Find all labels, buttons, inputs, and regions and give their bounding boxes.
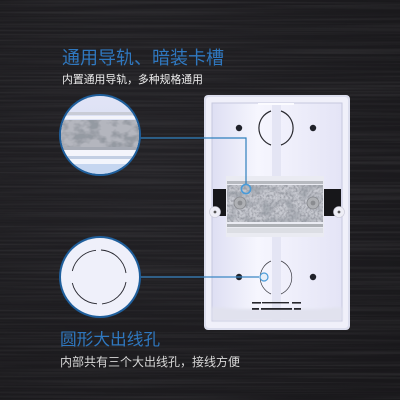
DIN rail xyxy=(226,176,324,237)
vent slots xyxy=(252,302,301,310)
box inner cavity xyxy=(212,103,342,321)
product: white enclosure box xyxy=(204,95,350,330)
text: rail description: 内置通用导轨，多种规格通用 xyxy=(62,72,203,86)
connector: hole callout line xyxy=(139,273,268,281)
black side tabs xyxy=(213,189,341,216)
knockout ring xyxy=(72,250,126,304)
bottom knockout hole xyxy=(260,261,292,294)
heading: round holes: 圆形大出线孔 xyxy=(60,330,160,349)
heading: rail: 通用导轨、暗装卡槽 xyxy=(62,48,224,68)
lens: rail close-up xyxy=(59,94,141,176)
mounting ears xyxy=(210,206,344,218)
rail screws xyxy=(234,197,246,209)
lens: round knockout close-up xyxy=(59,236,141,318)
top knockout hole xyxy=(259,111,293,145)
text: round holes description: 内部共有三个大出线孔，接线方便 xyxy=(60,354,240,369)
connector: rail callout line xyxy=(139,138,251,194)
box outer frame xyxy=(204,95,350,330)
screw holes xyxy=(236,125,316,280)
